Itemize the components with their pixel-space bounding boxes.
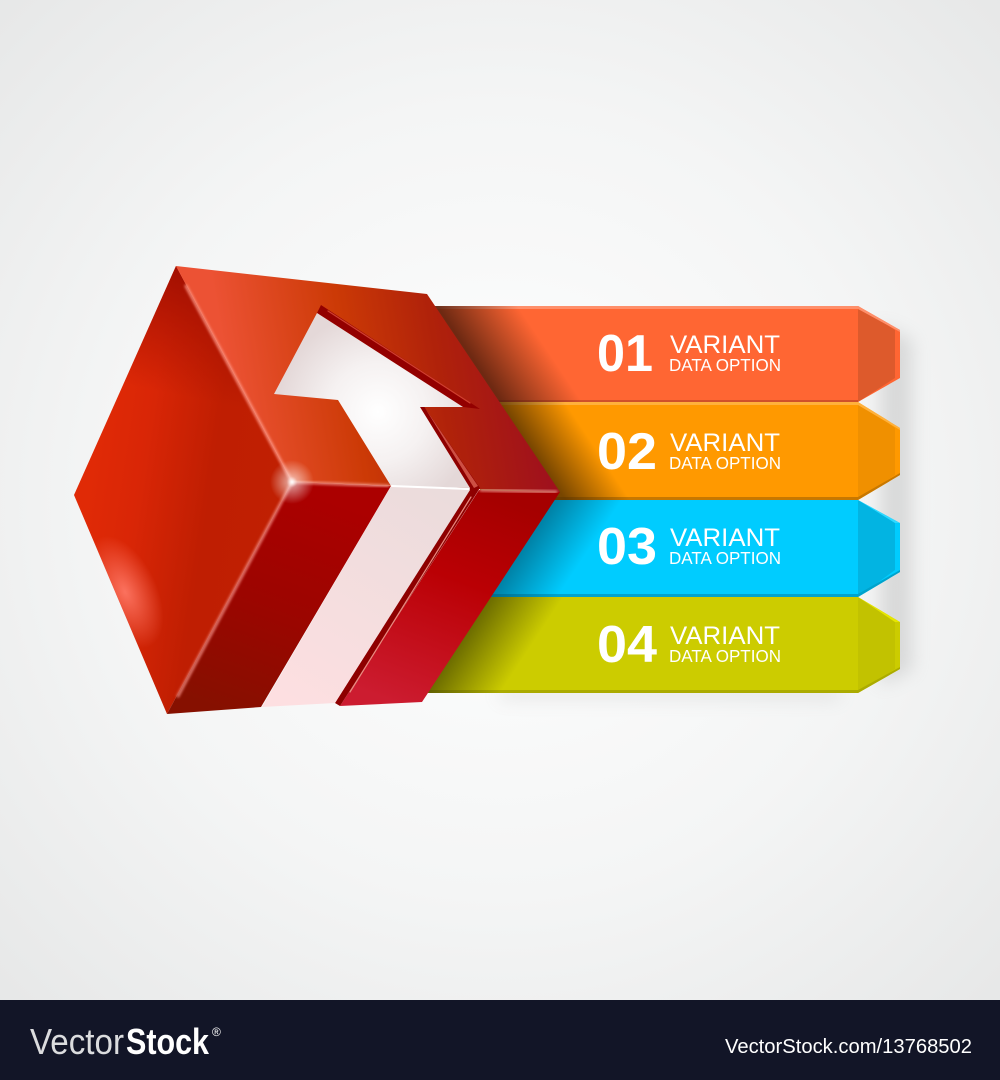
red cube with arrow bbox=[74, 266, 560, 714]
ribbon 03 bbox=[480, 500, 900, 597]
ribbon 04 bbox=[420, 597, 900, 693]
cube left face bbox=[74, 266, 292, 714]
arrow groove shadow bbox=[317, 305, 480, 706]
label VARIANT 03: VARIANT bbox=[670, 524, 780, 552]
corner glint bbox=[270, 460, 314, 504]
label DATA OPTION 01: DATA OPTION bbox=[669, 355, 781, 375]
cube lower left face bbox=[167, 482, 391, 714]
cube lower right face bbox=[340, 490, 560, 706]
footer bar bbox=[0, 1000, 1000, 1080]
number 01: 01 bbox=[597, 325, 653, 383]
label VARIANT 04: VARIANT bbox=[670, 622, 780, 650]
ribbon 02 bbox=[480, 402, 900, 500]
registered mark: ® bbox=[212, 1025, 221, 1039]
label DATA OPTION 03: DATA OPTION bbox=[669, 548, 781, 568]
cube top face bbox=[176, 266, 560, 492]
number 02: 02 bbox=[597, 423, 657, 481]
soft shadow behind ribbons bbox=[500, 325, 912, 698]
logo Stock: Stock bbox=[126, 1021, 210, 1062]
cube edge highlights bbox=[178, 286, 556, 696]
label VARIANT 01: VARIANT bbox=[670, 331, 780, 359]
arrow shaft lower strip bbox=[262, 486, 470, 707]
label VARIANT 02: VARIANT bbox=[670, 429, 780, 457]
image id: VectorStock.com/13768502 bbox=[725, 1036, 972, 1058]
ribbon 01 bbox=[430, 306, 900, 402]
number 04: 04 bbox=[597, 616, 657, 674]
logo Vector: Vector bbox=[30, 1021, 124, 1062]
label DATA OPTION 04: DATA OPTION bbox=[669, 646, 781, 666]
number 03: 03 bbox=[597, 518, 657, 576]
arrow head top face bbox=[274, 313, 470, 488]
label DATA OPTION 02: DATA OPTION bbox=[669, 453, 781, 473]
